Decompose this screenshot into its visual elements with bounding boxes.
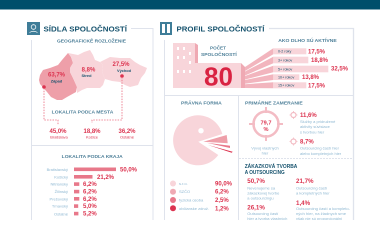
bar chart: years active: 0-2 roky [278,50,291,54]
item: 8,7 % outsourcing [290,138,342,156]
region: západ: 63,7% [48,72,66,78]
heading: primárne zameranie: PRIMÁRNE ZAMERANIE [245,100,303,106]
heading: sídla spoločností: SÍDLA SPOLOČNOSTÍ [44,24,128,33]
heading: zákazková tvorba [245,163,298,176]
stat: 1,4 %: ných hier, na žiadnych sme [296,211,347,216]
stat: 50,7 %: 50,7% [247,178,265,185]
bar chart: regions: Nitriansky [50,182,68,187]
item: 11,6 % services: Služby a pridružené [300,119,336,124]
bar chart: regions: Trnavský [52,204,68,209]
header bar [0,0,380,10]
item: 11,6 % services: s tvorbou hier [300,130,325,134]
legend: legal form [170,180,233,212]
building graphic with total: 80 [204,62,233,92]
stat: 50,7 %: Nevenujeme sa [247,186,276,191]
building graphic with total: POČET [210,46,226,50]
stats by city [49,129,136,140]
stats by city: Ostatné [120,134,135,140]
region: východ: Východ [117,68,132,73]
item: 8,7 % outsourcing: 8,7% [300,140,314,146]
region: stred: 8,8% [82,68,96,74]
icon: map pin [27,22,40,35]
region: východ: 27,5% [112,62,130,68]
bar chart: regions: 5,2% [83,212,97,218]
bar chart: years active: 32,5% [331,67,349,73]
heading: lokalita podľa mesta: LOKALITA PODĽA MESTA [52,109,113,114]
stat: 26,1 %: 26,1% [247,204,265,212]
target: own game development: 79,7 [261,120,271,126]
target: own game development: hier [262,150,269,156]
stats by city: Bratislava [50,134,69,140]
item: 11,6 % services [290,111,336,134]
heading: zákazková tvorba: A OUTSOURCING [245,170,285,176]
legend: legal form: 1,2% [215,206,229,212]
bar chart: regions [47,167,138,218]
icon: building [160,22,172,35]
bar chart: regions: Prešovský [50,196,68,201]
bar chart: years active: 10+ rokov [278,76,294,80]
region: východ [100,57,147,87]
region: stred [68,50,105,93]
legend: legal form: fyzická osoba [179,198,204,202]
stats by city: 18,8% [83,129,101,135]
city callout connector [42,74,124,125]
stat: 21,7 %: a kompletných hier [296,191,330,196]
stat: 50,7 % [247,178,280,201]
stat: 50,7 %: a outsourcingu [247,196,274,201]
bar chart: regions: Košický [54,174,68,179]
bar chart: years active: 17,5% [308,50,326,56]
legend: legal form: 90,0% [215,182,233,188]
legend: legal form: občianske združ. [179,206,209,211]
item: 8,7 % outsourcing: alebo kompletných hier [300,151,342,156]
building graphic with total: SPOLOČNOSTÍ [201,52,238,57]
legend: legal form: 2,5% [215,198,229,204]
heading: profil spoločností: PROFIL SPOLOČNOSTÍ [176,24,266,33]
stats by city: 36,2% [118,129,136,135]
heading: lokalita podľa kraja: LOKALITA PODĽA KRAJA [62,154,123,159]
bar chart: regions: 6,2% [83,182,97,188]
bar chart: regions: Žilinský [55,189,68,194]
pie chart: legal form [173,115,233,165]
heading: geografické rozloženie: GEOGRAFICKÉ ROZLOŽENIE [57,38,126,43]
stat: 26,1 %: Outsourcing častí [247,211,279,216]
heading: ako dlho sú aktívne: AKO DLHO SÚ AKTÍVNE [278,38,337,43]
bar chart: regions: 21,2% [97,175,115,181]
stat: 1,4 %: Outsourcing častí a kompleto- [296,206,351,211]
stat: 26,1 % [247,204,287,221]
legend: legal form: s.r.o. [179,181,188,186]
bar chart: regions: 6,2% [83,197,97,203]
stat: 21,7 %: 21,7% [296,178,314,185]
fan connector [245,48,273,88]
bar chart: regions: 5,0% [83,204,97,210]
map of Slovakia [39,50,147,100]
stat: 1,4 % [296,200,351,221]
stat: 1,4 %: 1,4% [296,200,311,207]
heading: zákazková tvorba: ZÁKAZKOVÁ TVORBA [245,163,298,170]
legend: legal form: 6,2% [215,190,229,196]
target: own game development: Vývoj vlastných [251,145,279,150]
legend: legal form: SZČO [179,189,190,194]
item: 11,6 % services: 11,6% [300,113,317,119]
building graphic with total [173,43,245,92]
stat: 50,7 %: zákazkovej tvorbe [247,191,280,196]
bar chart: regions: Ostatné [54,211,69,216]
bar chart: regions: Bratislavský [47,167,68,172]
bar chart: years active: 13,8% [302,75,320,81]
stats by city: Košice [86,134,99,140]
bar chart: regions: 6,2% [83,190,97,196]
region: stred: Stred [82,73,92,78]
item: 11,6 % services: aktivity súvisiace [300,124,331,129]
bar chart: years active: 15+ rokov [278,84,294,88]
bar chart: years active: 3+ rokov [278,58,292,62]
region: západ [39,53,77,100]
region: západ: Západ [51,78,63,84]
heading: právna forma: PRÁVNA FORMA [181,100,222,106]
stat: 21,7 %: Outsourcing častí [296,186,328,191]
stat: 21,7 % [296,178,330,196]
target: own game development [249,107,283,156]
bar chart: years active [273,48,349,90]
stats by city: 45,0% [49,129,67,135]
bar chart: years active: 17,5% [308,84,326,90]
item: 8,7 % outsourcing: Outsourcing častí hier [300,146,340,150]
bar chart: regions: 50,0% [120,168,138,174]
target: own game development: % [264,127,269,133]
bar chart: years active: 18,8% [311,58,329,64]
bar chart: years active: 5+ rokov [278,67,292,71]
